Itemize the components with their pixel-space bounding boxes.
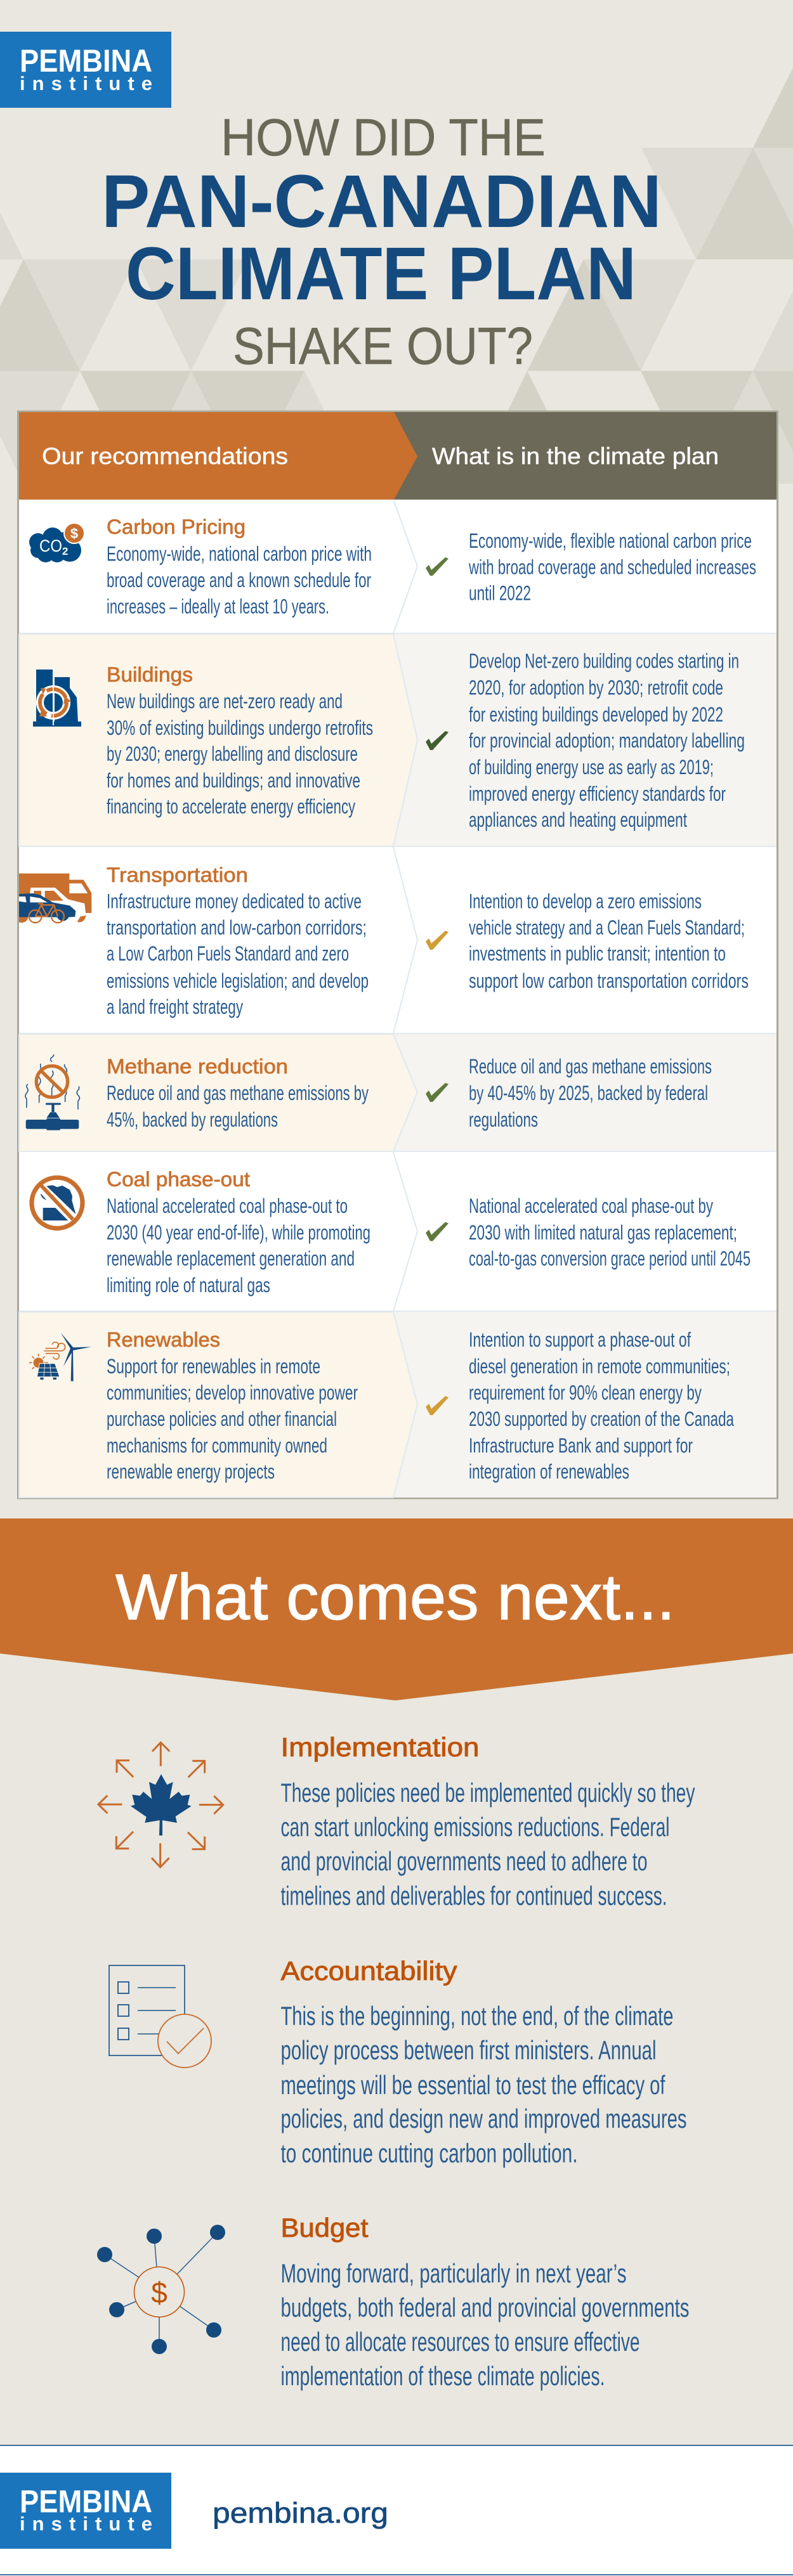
recommendation: carbon pricing: Carbon Pricing xyxy=(107,515,246,538)
icon: dollar hub network xyxy=(97,2225,225,2354)
row: transportation xyxy=(19,847,777,1034)
recommendation: coal phase-out: Coal phase-out xyxy=(107,1168,250,1191)
table header xyxy=(19,412,777,500)
banner: what comes next: What comes next... xyxy=(115,1561,675,1633)
plan: carbon pricing xyxy=(468,529,756,605)
plan: buildings xyxy=(469,649,745,831)
recommendation: transportation: transportation and low-carbon corridors; xyxy=(107,916,367,939)
icon: truck, car and bicycle xyxy=(19,874,91,922)
text block: budget: Moving forward, particularly in next year’s xyxy=(280,2258,627,2288)
icon: CO2 cloud with dollar coin: CO xyxy=(39,536,62,555)
recommendation: methane reduction: Methane reduction xyxy=(107,1055,288,1078)
recommendation: renewables: communities; develop innovative power xyxy=(107,1381,358,1404)
recommendation: carbon pricing: broad coverage and a known schedule for xyxy=(107,569,371,592)
plan: methane reduction xyxy=(469,1055,712,1131)
recommendation: buildings: by 2030; energy labelling and disclosure xyxy=(107,742,358,765)
title: CLIMATE PLAN xyxy=(126,232,636,316)
text block: accountability: to continue cutting carbon pollution. xyxy=(280,2138,577,2168)
icon: CO2 cloud with dollar coin: $ xyxy=(70,526,78,541)
recommendation: transportation: a land freight strategy xyxy=(107,995,243,1018)
recommendation: coal phase-out xyxy=(107,1168,370,1297)
recommendation: transportation: Transportation xyxy=(107,864,248,886)
website: pembina.org xyxy=(213,2497,388,2529)
recommendation: buildings xyxy=(107,663,373,818)
recommendation: coal phase-out: limiting role of natural gas xyxy=(107,1274,270,1297)
icon: CO2 cloud with dollar coin: 2 xyxy=(62,545,68,557)
plan: methane reduction: regulations xyxy=(469,1108,538,1131)
footer logo: PEMBINA xyxy=(20,2484,152,2520)
row: coal phase-out xyxy=(19,1152,777,1312)
recommendation: buildings: for homes and buildings; and innovative xyxy=(107,769,360,792)
recommendation: renewables: purchase policies and other financial xyxy=(107,1408,337,1430)
icon: wind turbine and solar panel xyxy=(29,1333,91,1381)
recommendation: renewables xyxy=(107,1328,358,1483)
logo: Pembina Institute xyxy=(0,32,171,108)
recommendation: coal phase-out: 2030 (40 year end-of-life), while promoting xyxy=(107,1221,370,1244)
recommendation: transportation xyxy=(107,864,369,1018)
icon: check mark xyxy=(426,1396,449,1415)
icon: dollar hub network: $ xyxy=(151,2276,167,2309)
logo: Pembina Institute: institute xyxy=(20,72,152,94)
table header: What is in the climate plan xyxy=(432,443,719,469)
icon: check mark xyxy=(426,1222,449,1241)
row: buildings xyxy=(19,634,777,847)
title: SHAKE OUT? xyxy=(233,316,533,375)
icon: check mark xyxy=(426,1083,449,1102)
icon: check mark xyxy=(426,931,449,950)
row: carbon pricing xyxy=(19,500,777,634)
recommendation: carbon pricing: increases – ideally at least 10 years. xyxy=(107,595,329,618)
recommendation: methane reduction xyxy=(107,1055,369,1131)
recommendation: renewables: Support for renewables in remote xyxy=(107,1355,320,1378)
text block: budget xyxy=(280,2213,689,2391)
banner: what comes next xyxy=(0,1518,793,1700)
recommendation: methane reduction: 45%, backed by regulations xyxy=(107,1108,278,1131)
text block: implementation xyxy=(280,1732,695,1911)
plan: renewables: requirement for 90% clean energy by xyxy=(469,1381,702,1404)
plan: renewables: Intention to support a phase-out of xyxy=(469,1328,691,1351)
recommendation: transportation: emissions vehicle legislation; and develop xyxy=(107,969,369,992)
icon: check mark xyxy=(426,557,449,576)
footer logo: institute xyxy=(20,2513,152,2535)
row: methane reduction xyxy=(19,1034,777,1152)
icon: crossed-out coal plant xyxy=(32,1177,82,1228)
footer logo xyxy=(0,2473,171,2549)
plan: renewables: integration of renewables xyxy=(469,1460,629,1483)
recommendation: renewables: mechanisms for community owned xyxy=(107,1434,327,1457)
plan: renewables: Infrastructure Bank and support for xyxy=(469,1434,693,1457)
recommendation: coal phase-out: National accelerated coal phase-out to xyxy=(107,1194,348,1217)
text block: budget: Budget xyxy=(280,2213,369,2243)
recommendation: coal phase-out: renewable replacement generation and xyxy=(107,1247,355,1270)
recommendation: carbon pricing xyxy=(107,515,372,618)
icon: maple leaf with arrows xyxy=(98,1742,223,1867)
recommendation: transportation: Infrastructure money dedicated to active xyxy=(107,890,362,913)
logo: Pembina Institute: PEMBINA xyxy=(20,43,152,79)
recommendation: transportation: a Low Carbon Fuels Standard and zero xyxy=(107,942,349,965)
icon: CO2 cloud with dollar coin xyxy=(29,522,85,562)
background triangle pattern xyxy=(0,36,793,484)
recommendation: buildings: 30% of existing buildings undergo retrofits xyxy=(107,716,373,739)
recommendation: carbon pricing: Economy-wide, national carbon price with xyxy=(107,543,372,566)
comparison table xyxy=(18,411,778,1498)
plan: buildings: appliances and heating equipment xyxy=(469,808,687,831)
plan: renewables xyxy=(469,1328,734,1483)
table header: Our recommendations xyxy=(42,443,288,469)
footer xyxy=(0,2445,793,2576)
recommendation: buildings: financing to accelerate energy efficiency xyxy=(107,795,355,818)
icon: checklist with check mark xyxy=(109,1965,211,2068)
row: renewables xyxy=(19,1312,777,1498)
plan: carbon pricing: until 2022 xyxy=(469,582,531,605)
text block: budget: implementation of these climate policies. xyxy=(280,2361,605,2391)
text block: accountability xyxy=(280,1956,686,2168)
text block: implementation: Implementation xyxy=(280,1732,480,1762)
title: PAN-CANADIAN xyxy=(102,160,662,243)
icon: building with recycling arrows xyxy=(33,670,81,727)
icon: check mark xyxy=(426,731,449,750)
recommendation: renewables: Renewables xyxy=(107,1328,220,1351)
text block: accountability: Accountability xyxy=(280,1956,457,1986)
recommendation: buildings: Buildings xyxy=(107,663,193,686)
recommendation: methane reduction: Reduce oil and gas methane emissions by xyxy=(107,1082,369,1104)
plan: transportation xyxy=(469,890,749,992)
icon: methane leak from valve xyxy=(25,1054,79,1130)
title xyxy=(102,108,662,375)
plan: coal phase-out xyxy=(469,1194,750,1270)
title: HOW DID THE xyxy=(221,108,546,167)
recommendation: renewables: renewable energy projects xyxy=(107,1460,275,1483)
recommendation: buildings: New buildings are net-zero ready and xyxy=(107,690,343,713)
